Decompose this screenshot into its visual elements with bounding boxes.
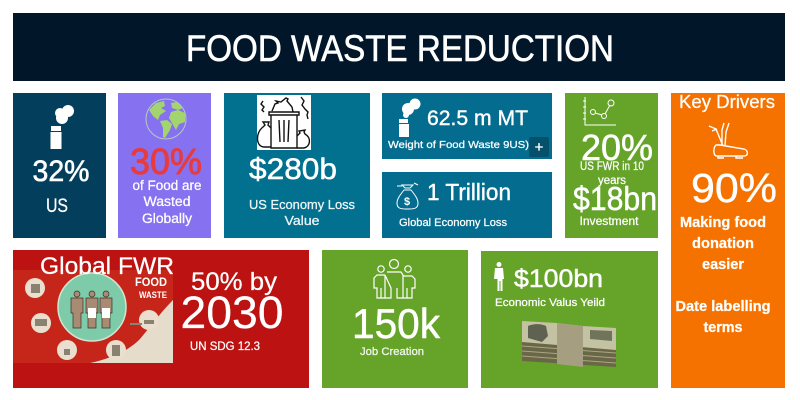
button: plus	[529, 137, 549, 157]
panel: 150k jobs	[322, 250, 468, 388]
label: US FWR in 10 years: US FWR in 10	[580, 161, 644, 173]
stat: 32%: 32%	[32, 155, 90, 188]
stat: $18bn: $18bn	[573, 180, 657, 217]
label: US economy loss value: US Economy Loss	[249, 197, 355, 212]
label: making food donation easier: easier	[702, 256, 744, 273]
illustration: food waste: FOOD	[135, 277, 167, 289]
icon: person	[494, 262, 504, 291]
image: stack of money	[522, 321, 616, 367]
heading: global FWR: Global FWR	[40, 253, 174, 280]
icon: money bag: $	[404, 196, 410, 208]
button: plus: +	[535, 139, 544, 156]
panel: $280b	[224, 93, 370, 238]
panel: 62.5 m MT	[382, 93, 552, 159]
stat: $280b: $280b	[249, 153, 337, 186]
label: date labelling terms: Date labelling	[676, 298, 770, 315]
stat: 90%: 90%	[691, 165, 777, 211]
label: weight of food waste: Weight of Food Waste 9US)	[388, 139, 529, 151]
title banner	[13, 13, 785, 81]
panel: 32% US	[13, 93, 106, 238]
stat: 1 Trillion: 1 Trillion	[427, 179, 511, 205]
panel: 1 Trillion	[382, 172, 552, 238]
label: making food donation easier: donation	[692, 235, 754, 252]
label: US economy loss value	[249, 197, 355, 228]
label: date labelling terms: terms	[704, 319, 742, 336]
icon: trash bin with bags	[257, 95, 311, 150]
label: job creation: Job Creation	[360, 346, 424, 358]
title banner: FOOD WASTE REDUCTION	[186, 28, 614, 69]
label: US economy loss value: Value	[284, 213, 320, 228]
stat: 30%: 30%	[130, 141, 202, 182]
stat: 62.5 m MT: 62.5 m MT	[427, 107, 528, 130]
label: US FWR in 10 years	[580, 161, 644, 187]
label: of food are wasted globally	[132, 178, 202, 226]
label: making food donation easier	[680, 214, 766, 273]
label: of food are wasted globally: Wasted	[144, 194, 190, 209]
illustration: food waste: WASTE	[139, 290, 167, 300]
panel: 30% wasted globally	[118, 93, 211, 238]
stat: 50% by: 50% by	[191, 268, 278, 296]
icon: money bag	[397, 183, 418, 209]
icon: smokestack	[399, 98, 420, 137]
stat: $100bn: $100bn	[514, 265, 603, 293]
label: making food donation easier: Making food	[680, 214, 766, 231]
label: investment: Investment	[580, 216, 639, 228]
panel: $100bn	[481, 251, 658, 388]
illustration: food waste	[13, 270, 173, 363]
label: US FWR in 10 years: years	[598, 175, 626, 187]
label: global economy loss: Global Economy Loss	[399, 217, 508, 229]
icon: treadmill	[709, 123, 747, 158]
icon: smokestack	[50, 105, 74, 149]
label: date labelling terms	[676, 298, 770, 336]
icon: globe	[146, 99, 186, 139]
heading: key drivers: Key Drivers	[679, 92, 775, 112]
stat: 2030: 2030	[180, 287, 284, 338]
stat: 20%: 20%	[581, 127, 653, 168]
label: of food are wasted globally: Globally	[142, 211, 192, 226]
label: US: US	[46, 196, 68, 217]
label: economic value yield: Economic Valus Yeild	[495, 297, 605, 309]
stat: 150k: 150k	[352, 300, 441, 347]
panel: 20% and $18bn	[565, 93, 658, 238]
label: of food are wasted globally: of Food are	[132, 178, 202, 193]
icon: line chart	[583, 97, 616, 125]
panel: global FWR	[13, 250, 309, 388]
label: UN SDG 12.3: UN SDG 12.3	[190, 339, 260, 353]
icon: people	[374, 260, 415, 298]
panel: key drivers	[671, 92, 785, 388]
